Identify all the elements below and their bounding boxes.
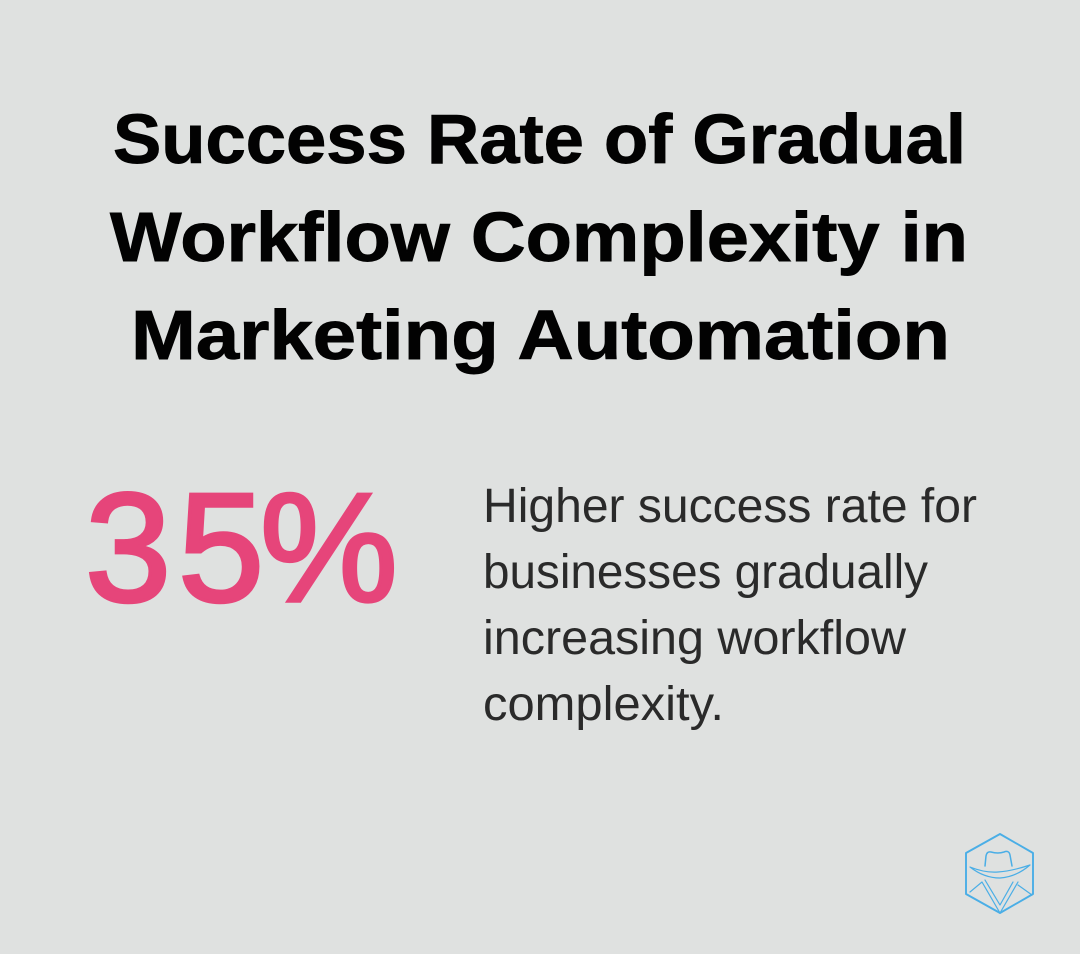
description text: Higher success rate for bbox=[483, 480, 977, 533]
title bbox=[110, 100, 968, 374]
description text bbox=[483, 480, 977, 731]
hat crown bbox=[985, 851, 1012, 866]
description text: increasing workflow bbox=[483, 612, 906, 665]
hexagon outline bbox=[966, 834, 1033, 913]
hat brim bbox=[970, 865, 1030, 878]
title: Success Rate of Gradual bbox=[113, 100, 966, 178]
title: Workflow Complexity in bbox=[110, 198, 968, 276]
description text: complexity. bbox=[483, 678, 724, 731]
description text: businesses gradually bbox=[483, 546, 928, 599]
icon: hexagon logo with hat bbox=[966, 834, 1033, 913]
collar bbox=[970, 880, 1032, 913]
title: Marketing Automation bbox=[131, 296, 950, 374]
statistic: 35%: 35% bbox=[85, 461, 398, 634]
